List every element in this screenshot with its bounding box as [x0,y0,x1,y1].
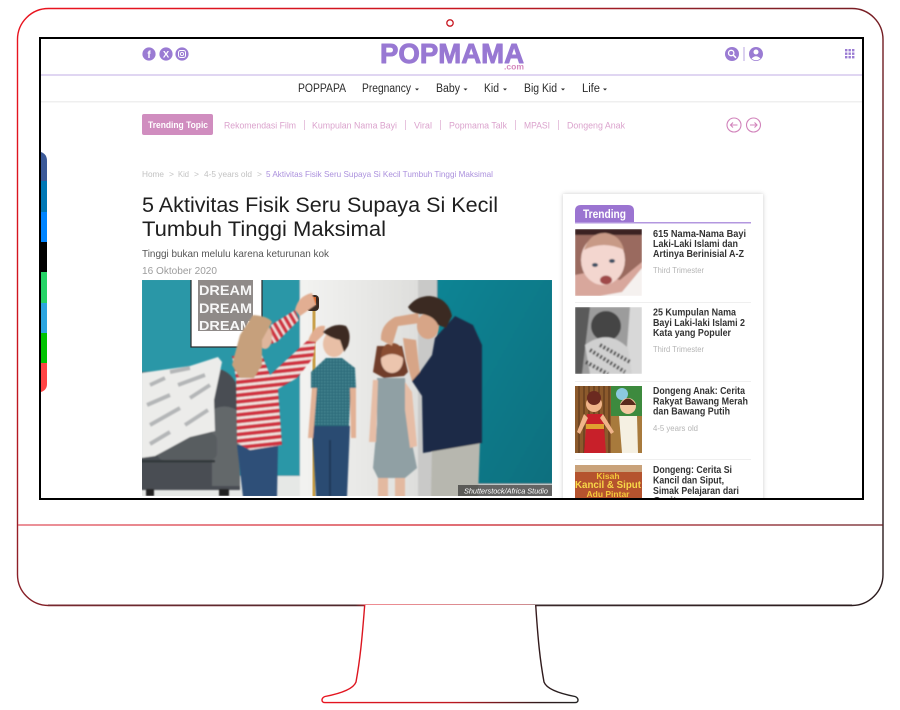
monitor chin divider [18,524,883,526]
carousel arrows [727,118,760,132]
breadcrumb: > [169,169,174,179]
wall poster [191,278,262,347]
trending item 2 [575,307,745,374]
item 1 text: Laki-Laki Islami dan [653,239,738,250]
navigation menu: Kid [484,83,499,95]
breadcrumb: > [194,169,199,179]
sidebar card: trending [563,194,763,514]
trending topic button [142,114,213,135]
item 1 text: Artinya Berinisial A-Z [653,249,744,260]
article subtitle: Tinggi bukan melulu karena keturunan kok [142,248,330,260]
header search and account icons [725,47,763,61]
card shadow and surface [563,194,763,514]
photo credit: Shutterstock/Africa Studio [464,486,548,496]
trending topic bar [142,114,760,135]
article title: 5 Aktivitas Fisik Seru Supaya Si Kecil [142,193,498,217]
header social icons: X [163,50,170,60]
navigation menu: Baby [436,83,460,95]
trending links: Dongeng Anak [567,120,625,130]
navigation menu: Life [582,83,600,95]
article title: Tumbuh Tinggi Maksimal [142,217,386,241]
navigation menu: Big Kid [524,83,557,95]
boy [308,325,356,497]
thumbnail: Kisah Kancil dan Siput: Adu Pintar [587,489,630,499]
item 1 text [653,229,746,275]
breadcrumb: Kid [178,169,189,179]
item 4 text: Dongeng: Cerita Si [653,465,732,476]
photo backdrop [141,279,553,497]
item 1 text: Third Trimester [653,265,704,275]
tape measure [306,295,319,496]
screen frame [40,38,863,499]
navigation menu [298,83,607,95]
trending tab heading: Trending [583,209,626,221]
item 1 text: 615 Nama-Nama Bayi [653,229,746,240]
father [381,296,482,497]
thumbnail: baby [575,229,642,296]
breadcrumb [142,171,492,178]
article photo: family measuring children's height [141,278,553,497]
breadcrumb: 5 Aktivitas Fisik Seru Supaya Si Kecil Tumbuh Tinggi Maksimal [266,169,493,179]
web page on screen [41,38,862,514]
trending links: Viral [414,120,432,130]
item 2 text: 25 Kumpulan Nama [653,308,736,318]
item 2 text: Kata yang Populer [653,328,731,339]
nav rule [41,101,862,102]
sofa with blanket [141,357,240,496]
trending tab heading [575,205,751,224]
navigation menu: Pregnancy [362,83,411,95]
trending topic button: Trending Topic [148,120,208,130]
mother [232,293,325,497]
logo: Popmama: POPMAMA [380,38,524,69]
thumbnail: Kisah Kancil dan Siput: Kisah [596,471,620,481]
header social icons: f [147,50,151,61]
wall poster: DREAM [199,300,252,316]
trending links: MPASI [524,120,550,130]
wall poster: DREAM [199,282,252,298]
apps grid icon [845,49,854,58]
screen border on top [40,38,863,499]
item 3 text: Dongeng Anak: Cerita [653,386,745,397]
trending links: Popmama Talk [449,120,507,130]
article title [142,193,498,241]
social share side bar [41,152,47,392]
breadcrumb: > [257,169,262,179]
item 3 text: 4-5 years old [653,423,698,433]
girl [369,343,417,497]
item 3 text: dan Bawang Putih [653,406,730,418]
navigation menu: POPPAPA [298,83,346,95]
monitor bottom edge [48,604,852,606]
thumbnail: cartoon Bawang Merah and Bawang Putih [575,386,642,453]
item 2 text: Bayi Laki-laki Islami 2 [653,318,745,329]
item 3 text: Rakyat Bawang Merah [653,396,748,408]
trending item 4 [575,465,739,507]
trending item 1 [575,229,746,296]
item 4 text: Simak Pelajaran dari [653,486,739,497]
item 4 text: Kancil dan Siput, [653,476,724,486]
wall poster: DREAM [199,318,252,333]
item 2 text [653,308,745,354]
header rule [41,74,862,76]
trending item 3 [575,386,748,453]
webcam [447,20,453,26]
monitor stand [322,605,578,703]
item 2 text: Third Trimester [653,344,704,354]
thumbnail: Kisah Kancil dan Siput [575,465,642,500]
trending links: Rekomendasi Film [224,120,296,130]
article date: 16 Oktober 2020 [142,265,217,277]
trending links: Kumpulan Nama Bayi [312,120,397,130]
item 3 text [653,386,748,433]
thumbnail: Kisah Kancil dan Siput: Kancil & Siput [575,479,641,491]
header social icons [142,47,189,61]
logo: Popmama: .com [504,62,524,72]
breadcrumb: Home [142,169,164,179]
breadcrumb: 4-5 years old [204,169,252,179]
item 4 text: Ceritanya [653,496,700,507]
trending links [224,120,625,130]
item 4 text [653,465,739,507]
thumbnail: sleeping baby, black and white [575,307,642,374]
